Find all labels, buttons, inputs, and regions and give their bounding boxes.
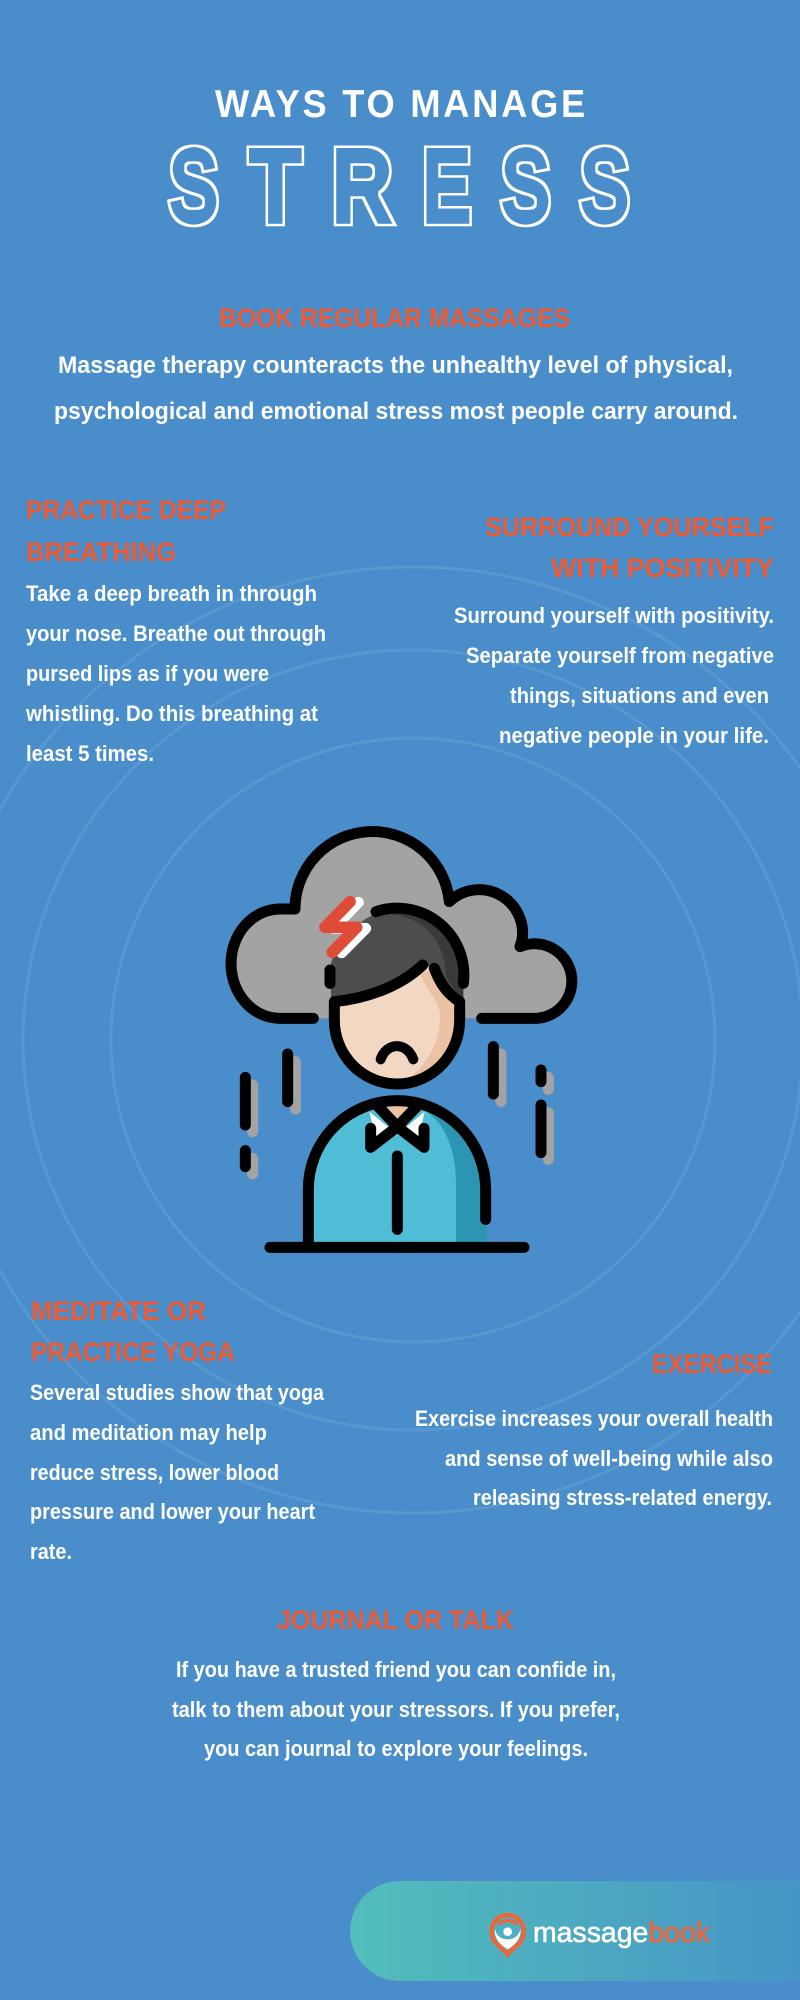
text block xyxy=(415,1406,773,1510)
heading: PRACTICE YOGA xyxy=(31,1337,235,1367)
text block: Several studies show that yoga xyxy=(30,1380,324,1405)
text block: Massage therapy counteracts the unhealthy level of physical, xyxy=(58,352,733,379)
text block: and meditation may help xyxy=(30,1420,267,1445)
title line: stress outlined: T xyxy=(249,128,302,245)
heading: PRACTICE DEEP xyxy=(26,495,226,525)
icon: storm cloud xyxy=(231,832,572,1018)
section: book regular massages xyxy=(54,303,738,425)
text block: reduce stress, lower blood xyxy=(30,1460,279,1485)
title xyxy=(168,83,630,245)
text block: whistling. Do this breathing at xyxy=(25,701,318,726)
section: journal or talk xyxy=(172,1605,620,1761)
icon: lightning bolt xyxy=(325,902,366,953)
text block: pursed lips as if you were xyxy=(26,661,269,686)
heading: BREATHING xyxy=(26,537,176,567)
title line: stress outlined: S xyxy=(168,128,219,245)
pill background xyxy=(350,1881,800,1981)
section: surround yourself with positivity xyxy=(454,512,774,748)
illustration: stressed person under a cloud xyxy=(231,832,572,1247)
text block: rate. xyxy=(30,1539,72,1564)
text block: talk to them about your stressors. If you prefer, xyxy=(172,1697,620,1722)
title line: stress outlined: S xyxy=(580,128,630,245)
text block: psychological and emotional stress most people carry around. xyxy=(54,398,738,425)
text block xyxy=(30,1380,324,1564)
heading xyxy=(26,495,226,567)
heading xyxy=(31,1296,235,1367)
text block: things, situations and even xyxy=(510,683,769,708)
icon: rain drops xyxy=(245,1047,548,1174)
title line: stress outlined: E xyxy=(422,129,472,245)
text block: Separate yourself from negative xyxy=(466,643,774,668)
text block xyxy=(25,581,326,766)
title line: stress outlined: R xyxy=(332,129,393,245)
text block: If you have a trusted friend you can confide in, xyxy=(176,1657,616,1682)
icon: shirt and shoulders xyxy=(270,1101,524,1247)
title line: stress outlined xyxy=(168,128,630,245)
heading: EXERCISE xyxy=(652,1349,772,1379)
footer banner xyxy=(350,1881,800,1981)
text block: Surround yourself with positivity. xyxy=(454,603,774,628)
heading: JOURNAL OR TALK xyxy=(277,1605,514,1635)
text block: Take a deep breath in through xyxy=(26,581,317,606)
section: exercise xyxy=(415,1349,773,1510)
text block: least 5 times. xyxy=(26,741,154,766)
section: practice deep breathing xyxy=(25,495,326,766)
text block xyxy=(54,352,738,425)
icon: massagebook logo pin xyxy=(492,1915,524,1954)
heading xyxy=(485,512,774,583)
text block xyxy=(172,1657,620,1761)
text block xyxy=(454,603,774,748)
text block: negative people in your life. xyxy=(499,723,769,748)
heading: BOOK REGULAR MASSAGES xyxy=(219,303,570,333)
text block: your nose. Breathe out through xyxy=(26,621,326,646)
heading: MEDITATE OR xyxy=(31,1296,206,1326)
heading: SURROUND YOURSELF xyxy=(485,512,774,542)
logo wordmark: massagebook xyxy=(533,1917,710,1949)
text block: pressure and lower your heart xyxy=(30,1499,315,1524)
title line: ways to manage: WAYS TO MANAGE xyxy=(215,83,588,126)
title line: stress outlined: S xyxy=(500,128,551,245)
icon: head with hair xyxy=(330,908,464,1084)
text block: you can journal to explore your feelings. xyxy=(204,1736,588,1761)
heading: WITH POSITIVITY xyxy=(551,553,774,583)
section: meditate or practice yoga xyxy=(30,1296,324,1564)
